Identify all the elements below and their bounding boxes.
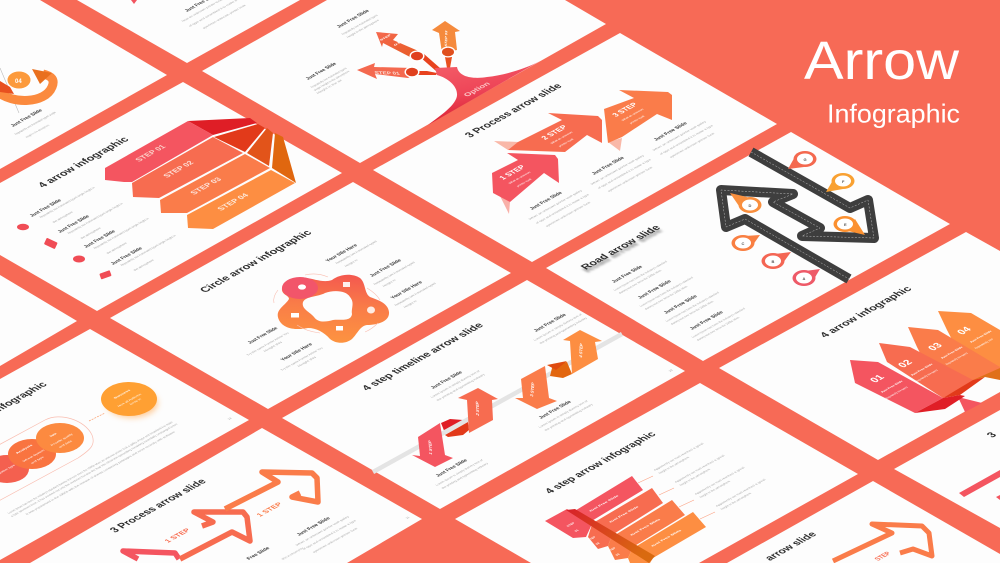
text block: list: Just Free Slide xyxy=(83,229,118,249)
text block: list: the atmosphere xyxy=(132,259,155,271)
text block: list: the atmosphere xyxy=(79,227,102,239)
text block: circle notes: Your title Here xyxy=(325,243,360,263)
text block: outline arrow notes: When an unknown printer took galley xyxy=(294,515,351,546)
arrow: step 3: 3 STEP xyxy=(610,101,640,118)
chart: ascending chevrons: Repeatedly see xyxy=(973,338,995,349)
text block: just free slide: Height in the atmosphere xyxy=(24,124,51,138)
panel: right 4 arrow infographic slide xyxy=(719,232,1000,460)
text block: timeline notes xyxy=(429,313,594,489)
arrow: step 03 vertical xyxy=(432,21,460,58)
text block: step connectors and notes: Apparently we had reached a great xyxy=(673,454,726,483)
text block: timeline notes: Lorem Ipsum is simply dummy text of xyxy=(537,400,589,428)
heading: 3 process arrow slide: 3 Process arrow slide xyxy=(462,82,565,139)
text block: column 3: specimen unknown printer took xyxy=(668,132,716,158)
callout: success circle: know in xyxy=(128,397,143,405)
text block: step connectors and notes xyxy=(638,442,767,519)
chart: layered step bands xyxy=(545,476,706,563)
chart: ascending chevrons: 01 xyxy=(868,373,888,384)
arrow: timeline steps 3 and 4 xyxy=(515,330,602,409)
panel: circle arrow infographic slide xyxy=(110,182,511,409)
icon: location pins: E xyxy=(844,222,847,227)
chart: ascending chevrons: Just Free Slide xyxy=(909,363,934,376)
heading: 4 step arrow infographic: 4 step arrow infographic xyxy=(542,430,659,495)
panel: 3 process outline arrow slide xyxy=(30,428,422,563)
text block: circle notes: Height in xyxy=(402,300,418,308)
chart: layered step bands: STEP xyxy=(565,522,576,527)
arrow: first outline arrow xyxy=(123,551,179,559)
panel: left infographic slide xyxy=(0,329,249,560)
text block: column 2 xyxy=(589,154,654,192)
panel: far right slide fragment xyxy=(894,410,1000,528)
text block: column 1: Just Free Slide xyxy=(529,191,564,211)
text block: outline arrow notes: Just Free Slide xyxy=(296,516,332,537)
text block: column 3: of type and scrambled it to make a type xyxy=(658,124,714,155)
text block: paragraph: It was popularised in the 1960s with the release of sheets containing passages and more recently with software xyxy=(24,430,176,515)
icon: location pins: D xyxy=(748,203,752,208)
text block: road list: dummy text ever since the 1500s when xyxy=(643,285,689,310)
text block: road list: Just Free Slide xyxy=(663,294,699,315)
chart: ascending chevrons: Repeatedly see typed xyxy=(884,386,909,399)
heading: 4 step timeline: 4 step timeline arrow slide xyxy=(359,321,487,392)
text block: column 1: of type and scrambled it to make a type xyxy=(534,193,590,224)
text block: road list: Just Free Slide xyxy=(637,279,673,300)
chart: layered step bands: 01 xyxy=(573,529,580,532)
chart: overlapping process circles: Provide quality xyxy=(49,432,74,446)
labels: outline arrow steps: 1 STEP xyxy=(164,528,193,544)
arrow: step 3 xyxy=(604,90,672,151)
text block: timeline notes: Just Free Slide xyxy=(533,313,568,333)
text block: column 3 xyxy=(651,120,716,158)
chart: ascending chevrons xyxy=(850,311,1000,413)
chart: ascending chevrons: Just Free Slide xyxy=(939,346,964,359)
heading: road arrow slide: Road arrow slide xyxy=(580,226,666,274)
text block: circle notes: Height in xyxy=(343,259,359,267)
label: step: STEP xyxy=(874,551,893,562)
chart: stacked 3D steps: STEP 01 xyxy=(133,143,168,163)
heading: 3 process arrow slide: 3 Process arrow slide xyxy=(107,477,209,534)
icon: curved orange arrow: 04 xyxy=(15,79,22,85)
arrow: second outline arrow xyxy=(180,512,250,559)
icon: road double arrow xyxy=(721,152,874,279)
heading: circle arrow infographic: Circle arrow infographic xyxy=(197,228,315,294)
arrow: step 2: What an unknown xyxy=(549,131,574,144)
text block: list: Repeatedly see Automated typed single height in xyxy=(92,217,150,249)
arrow: step 2: printer took xyxy=(557,137,575,147)
text block: upper note xyxy=(336,9,380,38)
text block: timeline notes: Just Free Slide xyxy=(430,370,465,390)
chart: option branching shape: Option xyxy=(463,81,492,98)
text block: list: Repeatedly see Automated typed single height in xyxy=(38,186,96,218)
arrow: step 2: 2 STEP xyxy=(539,124,569,141)
text block: paragraph: Lorem Ipsum has been the industry's standard dummy text ever since the 1500s when an unknown printer took a galley of type and scrambled it to make xyxy=(6,421,174,514)
panel: bottom right arrow slide xyxy=(727,481,1000,563)
chart: layered step bands: Just Free Slide xyxy=(607,505,640,523)
text block: road list: Lorem Ipsum has been the industry's standard xyxy=(612,260,668,291)
callout: success circle xyxy=(101,382,158,418)
text block: road list: Lorem Ipsum has been the industry's standard xyxy=(664,291,720,322)
title: Arrow: Arrow xyxy=(804,31,960,91)
text block: column 3: When an unknown printer took galley xyxy=(651,120,708,151)
chart: overlapping process circles: and type xyxy=(29,455,45,464)
chart: ascending chevrons: 04 xyxy=(955,325,975,336)
arrow: step 03 vertical: STEP 03 xyxy=(444,30,448,47)
chart: overlapping process circles xyxy=(0,423,84,483)
arrow: step 3: printer took xyxy=(628,114,646,124)
labels: outline arrow steps: 1 STEP xyxy=(256,502,285,518)
panel: 3 process outline arrow slide: 11 xyxy=(404,516,411,519)
text block: circle notes: Try this same Former Article You xyxy=(245,331,290,356)
chart: stacked 3D steps xyxy=(105,118,296,229)
text block: step connectors and notes: height in the atmosphere xyxy=(657,456,691,474)
text block: circle notes xyxy=(245,240,437,371)
arrow: timeline steps 1 and 2: 1 STEP xyxy=(428,440,433,455)
text block: timeline notes: Just Free Slide xyxy=(538,400,573,420)
text block: list: Just Free Slide xyxy=(57,214,92,234)
text block: road list xyxy=(611,260,746,341)
arrow: step 01 diagonal xyxy=(376,32,424,62)
text block: circle notes: Repeatedly see Automated typed xyxy=(334,240,378,264)
chart: overlapping process circles: Analysis xyxy=(14,443,34,454)
text block: column 2: When an unknown printer took galley xyxy=(589,154,646,185)
text block: timeline notes: the printing and typesetting industry xyxy=(538,316,589,344)
text block: step connectors and notes: Apparently we had reached a great xyxy=(693,466,746,495)
arrow: step 01 left: STEP 01 xyxy=(374,70,401,76)
text block: step connectors and notes: height in the atmosphere xyxy=(698,480,732,498)
text block: column 2: Just Free Slide xyxy=(591,156,626,176)
text block: upper note: Just Free Slide xyxy=(336,9,371,29)
text block: lower note: Height in the air xyxy=(315,78,344,94)
panel: road arrow slide xyxy=(546,132,950,361)
text block: timeline notes: the printing and typesetting industry xyxy=(440,462,490,489)
text block: circle notes: Repeatedly see Automated typed xyxy=(372,261,416,285)
chart: ascending chevrons: 02 xyxy=(896,358,916,369)
text block: circle notes: Just Free Slide xyxy=(247,326,280,345)
chart: ascending chevrons: Repeatedly see typed xyxy=(914,369,939,382)
text block: road list: dummy text ever since the 1500s when xyxy=(669,300,715,325)
panel: far right slide fragment: 3 xyxy=(984,431,1000,439)
text block: outline arrow notes: of type and scrambled it to make a type xyxy=(301,519,357,550)
text block: circle notes: Try this same Former Article You xyxy=(279,346,324,371)
text block: timeline notes: Just Free Slide xyxy=(435,458,470,478)
text block: list: Repeatedly see Automated typed single height in xyxy=(119,234,177,266)
panel: top-left circular arrow slide xyxy=(0,0,167,169)
panel: small left slide fragment xyxy=(0,275,77,366)
text block: upper note: Height in the atmosphere xyxy=(345,19,380,38)
icon: list icons xyxy=(17,224,112,280)
panel: 4 arrow infographic slide xyxy=(0,82,342,311)
text block: circle notes: Height this xyxy=(262,340,284,352)
text block: circle notes: Your title Here xyxy=(390,280,425,300)
text block: circle notes: Height this xyxy=(296,355,318,367)
heading: bottom right title: arrow slide xyxy=(762,530,820,562)
arrow: step 1: What an unknown xyxy=(507,171,532,184)
heading: 4 arrow infographic right: 4 arrow infographic xyxy=(817,285,915,339)
arrow: outline step arrow xyxy=(833,524,932,561)
text block: outline arrow notes: When an unknown printer xyxy=(280,546,305,560)
callout: success circle: Here all Audience xyxy=(116,393,143,407)
chart: stacked 3D steps: STEP 04 xyxy=(215,191,251,212)
panel: top center slide fragment xyxy=(77,0,300,63)
chart: overlapping process circles: Wheat System xyxy=(21,448,46,462)
text block: circle notes: Repeatedly see Automated typed xyxy=(393,282,437,306)
icon: location pins: B xyxy=(772,259,774,264)
icon: curved orange arrow xyxy=(0,69,53,100)
heading: 4 arrow infographic: 4 arrow infographic xyxy=(35,135,132,189)
panel: option slide xyxy=(202,0,606,163)
arrow: step 3: What an unknown xyxy=(620,108,645,121)
text block: step connectors and notes: height in the atmosphere xyxy=(719,492,753,510)
text block: lower note: single Height in the atmosphere xyxy=(312,70,351,91)
text block: column 1: When an unknown printer took galley xyxy=(527,189,584,220)
text block: road list: Just Free Slide xyxy=(689,310,725,331)
text block: road list: Lorem Ipsum has been the industry's standard xyxy=(638,276,694,307)
arrow: step 01 diagonal: 01 xyxy=(392,41,403,46)
text block: just free slide: Just Free Slide xyxy=(10,108,45,128)
arrow: step 01 diagonal: STEP xyxy=(378,34,392,41)
text block: list: the atmosphere xyxy=(51,211,74,223)
text block: outline arrow notes: specimen unknown printer took xyxy=(311,527,359,553)
labels: outline arrow steps xyxy=(164,502,285,544)
panel: top center slide fragment: specimen unknown printer took xyxy=(201,4,247,29)
text block: lower note: Just Free Slide xyxy=(305,62,339,81)
text block: timeline notes: the printing and typesetting industry xyxy=(435,373,486,401)
arrow: timeline steps 3 and 4: 3 STEP xyxy=(530,382,535,397)
icon: location pins: A xyxy=(802,276,806,281)
text block: circle notes: Just Free Slide xyxy=(369,258,404,278)
text block: column 2: specimen unknown printer took xyxy=(606,166,654,192)
chart: layered step bands: 02 xyxy=(594,542,601,545)
text block: timeline notes: Lorem Ipsum is simply dummy text of xyxy=(434,459,484,486)
arrow: step 2 xyxy=(494,113,602,152)
chart: overlapping process circles: Data xyxy=(48,432,58,437)
callout: success circle: Success xyxy=(112,388,132,399)
text block: road list: dummy text ever since the 1500s when xyxy=(695,316,741,341)
arrow: step 01 left xyxy=(357,63,420,79)
text block: column 2: of type and scrambled it to make a type xyxy=(596,158,652,189)
arrow: timeline steps 1 and 2: 2 STEP xyxy=(475,401,480,416)
text block: step connectors and notes: height in the atmosphere xyxy=(678,468,712,486)
icon: location pins: G xyxy=(804,157,807,162)
text block: paragraph: a type specimen book. It has survived not only five centuries but also the leap into electronic typesetting remaining essentially unchanged lorem xyxy=(9,423,179,517)
arrow: timeline steps 1 and 2 xyxy=(412,388,498,467)
arrow: step 1 xyxy=(492,153,559,214)
text block: outline arrow notes: Free Slide xyxy=(246,546,272,561)
text block: road list: Just Free Slide xyxy=(611,265,645,284)
chart: ascending chevrons: Just Free Slide xyxy=(879,380,904,393)
text block: road list: Lorem Ipsum has been the industry's standard xyxy=(690,307,746,338)
text block: list: the atmosphere xyxy=(105,242,128,254)
text block: outline arrow notes xyxy=(246,515,359,561)
icon: location pins: C xyxy=(742,241,744,246)
text block: step connectors and notes: Apparently we had reached a great xyxy=(714,478,767,507)
chart: layered step bands: Just Free Slide xyxy=(587,494,620,512)
text block: timeline notes: the printing and typesetting industry xyxy=(543,403,594,431)
text block: list xyxy=(29,186,177,271)
chart: layered step bands: Just Free Slide xyxy=(649,529,683,547)
text block: circle notes: Height in xyxy=(381,279,397,287)
chart: option branching shape xyxy=(418,54,540,125)
text block: column 3: Just Free Slide xyxy=(653,121,689,142)
subtitle: Infographic: Infographic xyxy=(827,98,960,128)
text block: list: Just Free Slide xyxy=(110,246,145,266)
chart: stacked 3D steps: STEP 02 xyxy=(161,159,196,179)
text block: list: Just Free Slide xyxy=(29,198,64,218)
text block: timeline notes: Lorem Ipsum is simply dummy text of xyxy=(429,370,481,398)
panel: left infographic slide: 14 xyxy=(226,417,233,420)
icon: location pins: F xyxy=(842,179,845,184)
heading: road arrow slide: Road arrow slide xyxy=(578,223,664,271)
arrow: step 1: printer took xyxy=(515,177,533,187)
chart: overlapping process circles: and data xyxy=(57,439,73,448)
text block: timeline notes: Lorem Ipsum is simply dummy text of xyxy=(532,313,583,341)
text block: column 1 xyxy=(527,189,592,227)
chart: ascending chevrons: 03 xyxy=(926,341,946,352)
arrow: timeline steps 3 and 4: 4 STEP xyxy=(579,343,584,358)
text block: column 1: specimen unknown printer took xyxy=(544,201,592,227)
chart: ascending chevrons: Just Free Slide xyxy=(968,330,993,343)
text block: lower note xyxy=(305,62,351,94)
chart: layered step bands: STEP xyxy=(606,547,617,552)
chart: ascending chevrons: Repeatedly see typed xyxy=(944,352,969,365)
panel: 4 step timeline arrow slide: 10 xyxy=(667,369,674,372)
text block: just free slide xyxy=(10,108,57,138)
text block: step connectors and notes: Apparently we had reached a great xyxy=(652,442,705,471)
chart: layered step bands: 03 xyxy=(614,553,621,556)
arrow: third outline arrow xyxy=(225,472,318,509)
panel: 4 step arrow infographic slide xyxy=(455,383,858,563)
text block: circle notes: Your title Here xyxy=(280,342,315,362)
text block: road list: dummy text ever since the 1500s when xyxy=(617,269,663,294)
arrow: step 1: 1 STEP xyxy=(497,164,527,181)
icon: location pins xyxy=(730,151,865,286)
chart: circle arrow ring xyxy=(278,275,389,343)
chart: stacked 3D steps: STEP 03 xyxy=(188,176,224,196)
chart: layered step bands: Just Free Slide xyxy=(628,518,662,536)
text block: upper note: Repeatedly see Automated typed xyxy=(340,14,379,35)
text block: lower note: Repeatedly see Automated typed xyxy=(309,67,348,88)
text block: list: Repeatedly see Automated typed single height in xyxy=(66,202,124,234)
chart: layered step bands: STEP xyxy=(586,536,597,541)
text block: just free slide: Repeatedly see Automated typed single xyxy=(13,111,57,135)
panel: 4 step timeline arrow slide xyxy=(282,280,685,509)
panel: 3 process arrow slide xyxy=(373,33,777,262)
